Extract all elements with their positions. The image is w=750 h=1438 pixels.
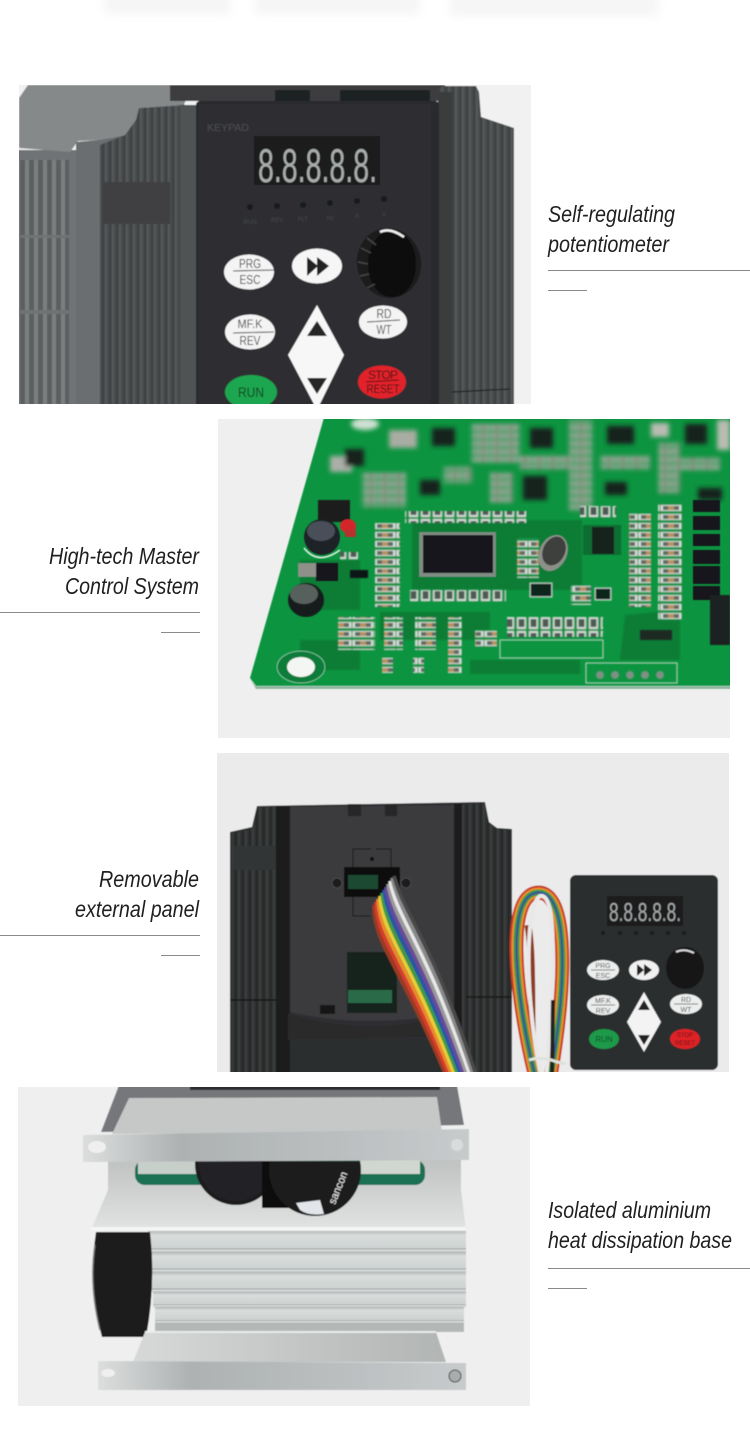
bottom flange bbox=[98, 1361, 466, 1390]
panel: control board photo bbox=[218, 414, 740, 738]
potentiometer knob bbox=[357, 228, 421, 298]
back plate bbox=[91, 1160, 466, 1230]
keypad buttons bbox=[587, 960, 702, 1052]
LED display bbox=[254, 136, 380, 185]
keypad buttons: RD bbox=[681, 997, 691, 1004]
caption: Isolated aluminium heat dissipation base: Isolated aluminium bbox=[548, 1197, 711, 1223]
button MF.K/REV: MF.K bbox=[238, 317, 262, 331]
caption: Removable external panel: external panel bbox=[75, 896, 200, 922]
top flange bbox=[83, 1129, 469, 1162]
side wall of drive housing bbox=[19, 149, 77, 404]
keypad buttons: STOP bbox=[677, 1033, 693, 1039]
caption: Removable external panel bbox=[0, 866, 200, 956]
keypad face bbox=[196, 101, 439, 411]
LED display: 8.8.8.8.8. bbox=[258, 139, 377, 192]
caption: Isolated aluminium heat dissipation base bbox=[548, 1197, 750, 1289]
status LEDs: A bbox=[355, 214, 359, 220]
direction diamond bbox=[288, 305, 344, 410]
keypad buttons: MF.K bbox=[595, 998, 611, 1005]
panel: aluminium heat sink photo bbox=[10, 1080, 538, 1414]
capacitor brand: sancon bbox=[327, 1170, 351, 1206]
internal board bbox=[135, 1160, 425, 1185]
top vent strip bbox=[170, 85, 445, 101]
button MF.K/REV: REV bbox=[240, 333, 261, 348]
keypad display bbox=[607, 896, 683, 927]
button fast-forward bbox=[292, 248, 342, 284]
detached keypad bbox=[570, 875, 718, 1070]
caption: Self-regulating potentiometer: potentiometer bbox=[547, 231, 670, 257]
button RD/WT: RD bbox=[376, 306, 392, 321]
status LEDs: REV bbox=[271, 218, 283, 224]
recessed mount bbox=[289, 805, 454, 1021]
second IC bbox=[583, 525, 621, 555]
housing roof bbox=[19, 85, 195, 152]
keypad buttons: RESET bbox=[675, 1041, 695, 1047]
capacitors bbox=[195, 1123, 361, 1216]
keypad buttons: ESC bbox=[596, 973, 610, 980]
cable tie bbox=[529, 1058, 566, 1064]
keypad display: 8.8.8.8.8. bbox=[609, 897, 681, 927]
status LEDs: FLT bbox=[298, 217, 308, 223]
caption: Self-regulating potentiometer bbox=[547, 201, 750, 291]
keypad buttons: WT bbox=[681, 1007, 692, 1014]
panel: keypad photo bbox=[15, 80, 540, 411]
upper capacitor bbox=[304, 500, 350, 558]
right ribbed column bbox=[438, 86, 514, 410]
drive housing behind bbox=[101, 1080, 464, 1132]
crystal oscillator bbox=[538, 534, 569, 572]
looped ribbon cable bbox=[516, 893, 562, 1080]
red LED bbox=[340, 519, 356, 537]
keypad buttons: REV bbox=[596, 1008, 611, 1015]
button RUN: RUN bbox=[238, 384, 264, 400]
keypad buttons: PRG bbox=[595, 963, 611, 970]
caption: High-tech Master Control System: High-tech Master bbox=[49, 543, 200, 569]
status LEDs bbox=[244, 196, 387, 226]
button MF.K/REV bbox=[225, 314, 275, 350]
button RUN bbox=[225, 375, 277, 409]
caption: Self-regulating potentiometer: Self-regulating bbox=[548, 201, 675, 227]
rainbow ribbon cable bbox=[374, 876, 477, 1078]
status LEDs: RUN bbox=[244, 220, 256, 226]
button STOP/RESET bbox=[358, 366, 406, 398]
button STOP/RESET: RESET bbox=[366, 382, 400, 396]
button RD/WT bbox=[359, 306, 407, 338]
keypad knob bbox=[666, 947, 704, 989]
right chip stack bbox=[693, 500, 730, 645]
green PCB bbox=[250, 414, 740, 686]
mounting hole bbox=[277, 651, 325, 683]
cooling fan bbox=[93, 1232, 152, 1337]
main MCU chip bbox=[419, 532, 496, 577]
lower capacitor bbox=[288, 563, 338, 617]
button PRG/ESC: PRG bbox=[239, 256, 261, 271]
blurred far components bbox=[330, 418, 730, 510]
lower plate bbox=[133, 1332, 446, 1362]
connector socket bbox=[332, 849, 411, 916]
drive body bbox=[230, 802, 512, 1080]
status LEDs: Hz bbox=[326, 216, 334, 222]
status LEDs: V bbox=[382, 212, 386, 218]
caption: High-tech Master Control System bbox=[0, 543, 200, 633]
panel: removable external panel photo bbox=[210, 745, 735, 1080]
near components bbox=[338, 503, 682, 683]
keypad label: KEYPAD bbox=[207, 123, 249, 134]
darker copper traces bbox=[300, 520, 680, 674]
keypad buttons: RUN bbox=[595, 1035, 613, 1044]
lower circuit board bbox=[320, 952, 397, 1014]
button PRG/ESC bbox=[224, 254, 274, 290]
button PRG/ESC: ESC bbox=[240, 272, 260, 287]
faded strips at top edge bbox=[105, 0, 658, 16]
heat sink fins bbox=[148, 1231, 466, 1332]
button STOP/RESET: STOP bbox=[368, 368, 398, 382]
button RD/WT: WT bbox=[376, 322, 392, 337]
caption: High-tech Master Control System: Control System bbox=[65, 573, 199, 599]
caption: Removable external panel: Removable bbox=[99, 866, 199, 892]
ribbed corner column bbox=[76, 104, 196, 410]
